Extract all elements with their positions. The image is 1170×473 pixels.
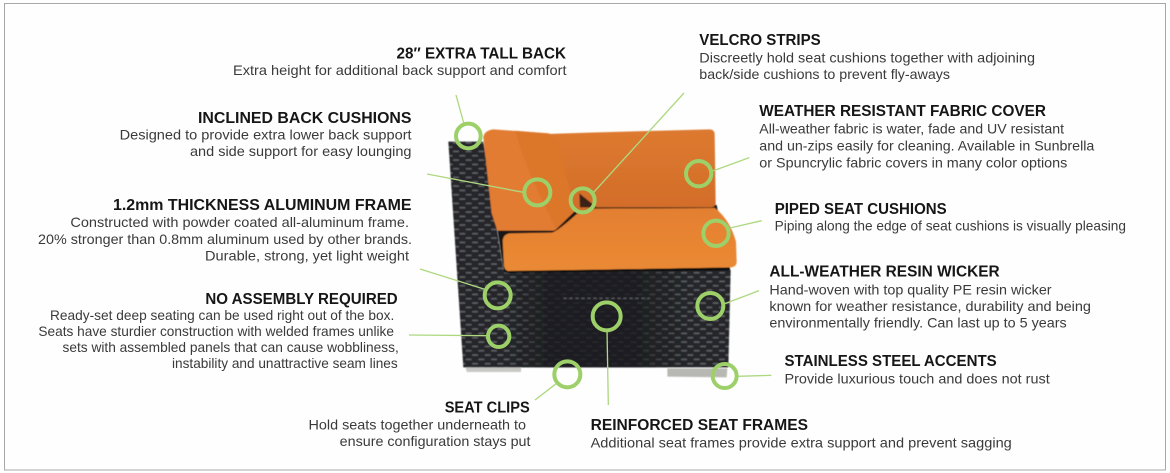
text block: piped seat cushions — [775, 201, 1126, 234]
text block: inclined back cushions: and side support for easy lounging — [190, 144, 412, 159]
text block: reinforced seat frames: Additional seat frames provide extra support and prevent sagging — [591, 435, 1012, 450]
ring: reinforced frames — [593, 302, 621, 330]
steel foot left — [465, 366, 521, 372]
side cushion fold — [515, 131, 575, 229]
side cushion — [483, 129, 575, 231]
text block: velcro strips: back/side cushions to prevent fly-aways — [699, 67, 950, 82]
text block: 28 inch extra tall back: Extra height for additional back support and comfort — [233, 63, 567, 78]
text block: weather resistant fabric cover: or Spuncrylic fabric covers in many color options — [759, 155, 1068, 170]
text block: inclined back cushions — [120, 110, 412, 159]
ring: inclined back cushions — [524, 179, 550, 205]
text block: all-weather resin wicker: known for weather resistance, durability and being — [769, 299, 1091, 314]
text block: seat clips: Hold seats together underneath to — [308, 417, 526, 432]
line: extra tall back — [456, 95, 464, 124]
text block: aluminum frame — [38, 197, 412, 264]
text block: reinforced seat frames — [591, 417, 1012, 450]
shadow under seat — [507, 269, 730, 272]
ring: aluminum frame — [485, 282, 511, 308]
line: reinforced frames — [607, 329, 608, 405]
wicker darker front — [507, 272, 687, 367]
sofa product photo — [448, 129, 737, 377]
text block: no assembly required: sets with assembled panels that can cause wobbliness, — [62, 340, 399, 355]
text block: stainless steel accents — [784, 353, 1050, 386]
text block: weather resistant fabric cover: WEATHER RESISTANT FABRIC COVER — [759, 103, 1046, 120]
text block: weather resistant fabric cover — [759, 103, 1095, 170]
text block: no assembly required: instability and unattractive seam lines — [172, 356, 398, 371]
text block: seat clips: SEAT CLIPS — [445, 399, 530, 416]
text block: seat clips: ensure configuration stays put — [340, 434, 531, 449]
line: inclined back cushions — [427, 174, 523, 192]
text block: 28 inch extra tall back — [233, 46, 567, 78]
ring: no assembly — [488, 326, 509, 347]
text block: no assembly required: Ready-set deep seating can be used right out of the box. — [50, 308, 394, 323]
ring: seat clips — [554, 361, 580, 387]
line: piped cushions — [730, 221, 762, 228]
velcro gap shadow — [579, 193, 597, 207]
text block: reinforced seat frames: REINFORCED SEAT FRAMES — [591, 417, 808, 434]
text block: all-weather resin wicker: Hand-woven with top quality PE resin wicker — [769, 282, 1052, 297]
text block: velcro strips: Discreetly hold seat cushions together with adjoining — [699, 50, 1035, 65]
text block: stainless steel accents: STAINLESS STEEL ACCENTS — [784, 353, 997, 370]
ring: velcro strips — [571, 188, 595, 212]
line: velcro strips — [593, 93, 684, 193]
text block: stainless steel accents: Provide luxurious touch and does not rust — [784, 371, 1050, 386]
text block: inclined back cushions: Designed to provide extra lower back support — [120, 128, 412, 142]
text block: seat clips — [308, 399, 531, 449]
text block: piped seat cushions: Piping along the edge of seat cushions is visually pleasing — [775, 219, 1126, 234]
wicker base — [448, 142, 731, 367]
text block: velcro strips: VELCRO STRIPS — [699, 32, 821, 49]
back cushion — [547, 129, 716, 213]
text block: all-weather resin wicker — [769, 264, 1091, 330]
text block: aluminum frame: 1.2mm THICKNESS ALUMINUM FRAME — [113, 197, 412, 214]
text block: no assembly required — [38, 291, 399, 371]
line: seat clips — [535, 383, 557, 400]
callout lines and rings — [409, 93, 771, 405]
text block: piped seat cushions: PIPED SEAT CUSHIONS — [775, 201, 947, 218]
line: stainless accents — [738, 375, 771, 376]
seat cushion — [503, 208, 737, 271]
line: aluminum frame — [420, 269, 485, 289]
text block: aluminum frame: 20% stronger than 0.8mm aluminum used by other brands. — [38, 232, 412, 247]
text block: all-weather resin wicker: environmentally friendly. Can last up to 5 years — [769, 315, 1067, 330]
text block: weather resistant fabric cover: and un-zips easily for cleaning. Available in Sunbrella — [759, 138, 1095, 153]
text block: all-weather resin wicker: ALL-WEATHER RESIN WICKER — [769, 264, 1000, 281]
text block: aluminum frame: Constructed with powder coated all-aluminum frame. — [70, 215, 409, 230]
text block: aluminum frame: Durable, strong, yet light weight — [205, 248, 409, 264]
ring: fabric cover — [686, 161, 711, 186]
shadow behind cushions — [485, 147, 730, 273]
text block: no assembly required: NO ASSEMBLY REQUIRED — [205, 291, 398, 308]
ring: stainless accents — [713, 364, 737, 388]
line: fabric cover — [713, 158, 749, 171]
text block: velcro strips — [699, 32, 1035, 82]
ring: piped cushions — [703, 221, 729, 246]
ring: extra tall back — [456, 124, 481, 148]
front seam — [563, 296, 650, 300]
text block: inclined back cushions: INCLINED BACK CUSHIONS — [198, 110, 412, 127]
text block: weather resistant fabric cover: All-weather fabric is water, fade and UV resistant — [759, 121, 1064, 136]
text block: 28 inch extra tall back: 28″ EXTRA TALL BACK — [396, 46, 567, 62]
steel foot right — [667, 368, 727, 377]
ring: wicker — [697, 293, 723, 319]
line: no assembly — [409, 333, 487, 338]
text block: no assembly required: Seats have sturdier construction with welded frames unlike — [38, 324, 394, 339]
line: wicker — [724, 291, 759, 304]
